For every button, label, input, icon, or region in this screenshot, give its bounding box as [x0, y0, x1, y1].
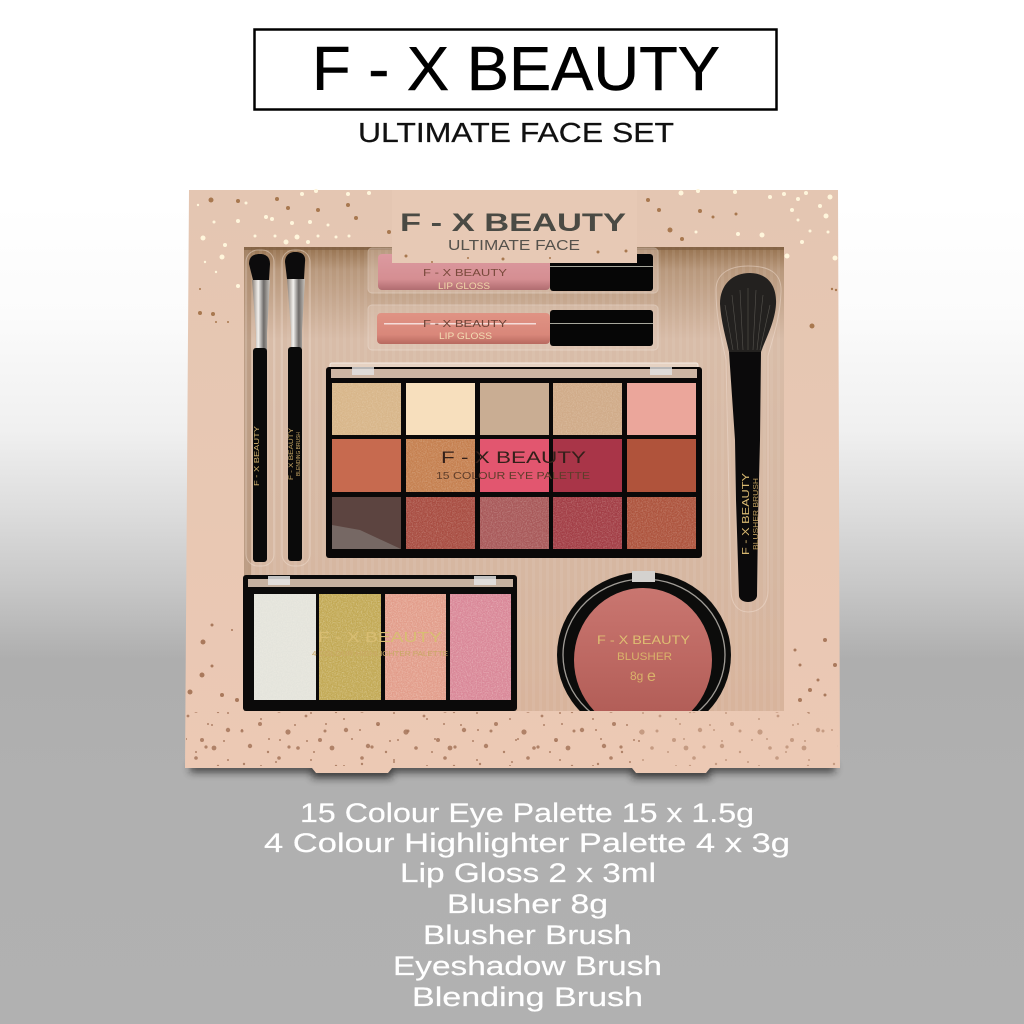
blending brush: BLENDING BRUSH: [296, 432, 302, 476]
blusher compact: 8g: [630, 669, 643, 683]
15 colour eye palette: 15 COLOUR EYE PALETTE: [436, 470, 590, 482]
blusher label: F - X BEAUTY: [597, 635, 690, 647]
top flap: F - X BEAUTY: [400, 209, 626, 237]
blusher compact: [557, 571, 731, 711]
highlighter pans: [254, 594, 511, 700]
contents list: [264, 798, 790, 1012]
subtitle: ULTIMATE FACE SET: [358, 117, 674, 148]
window tray: [244, 247, 784, 711]
lip gloss 2: LIP GLOSS: [439, 331, 492, 342]
product box shadow: [190, 764, 835, 778]
blusher brush: F - X BEAUTY: [741, 473, 752, 555]
title box: F - X BEAUTY: [312, 35, 720, 104]
contents list: Eyeshadow Brush: [393, 951, 662, 981]
palette label: F - X BEAUTY: [441, 449, 586, 467]
eyeshadow brush: F - X BEAUTY: [252, 426, 261, 486]
card frame: [185, 190, 840, 773]
top flap: ULTIMATE FACE: [448, 238, 580, 254]
blending brush: [285, 252, 305, 561]
eyeshadow pans: [332, 383, 696, 549]
lip gloss 1: F - X BEAUTY: [423, 267, 507, 279]
contents list: Blending Brush: [412, 982, 643, 1012]
4 colour highlighter palette: [243, 575, 517, 711]
lip gloss 1: LIP GLOSS: [438, 281, 490, 291]
4 colour highlighter palette: 4 COLOUR HIGHLIGHTER PALETTE: [312, 649, 448, 658]
product box: [185, 189, 840, 773]
contents list: 4 Colour Highlighter Palette 4 x 3g: [264, 828, 790, 858]
gold speckles top: [197, 189, 838, 328]
blusher compact: BLUSHER: [617, 651, 672, 663]
eyeshadow brush: [249, 254, 270, 562]
contents list: 15 Colour Eye Palette 15 x 1.5g: [300, 798, 754, 828]
blusher compact: e: [647, 668, 656, 685]
highlighter label: F - X BEAUTY: [318, 629, 442, 646]
blending brush: F - X BEAUTY: [288, 427, 295, 480]
blusher brush: BLUSHER BRUSH: [751, 478, 760, 550]
top flap: [392, 190, 637, 263]
contents list: Lip Gloss 2 x 3ml: [400, 858, 656, 888]
lip gloss 1: [368, 248, 658, 293]
title box: [254, 30, 776, 110]
gold speckles bottom: [186, 712, 838, 766]
blusher brush: [720, 273, 776, 602]
15 colour eye palette: [326, 363, 702, 558]
contents list: Blusher 8g: [447, 889, 608, 919]
blister outlines: [246, 250, 781, 612]
gold speckles left and right lower: [188, 624, 837, 702]
contents list: Blusher Brush: [423, 920, 632, 950]
lip gloss 2: [368, 305, 658, 350]
lip gloss 2: F - X BEAUTY: [423, 318, 507, 330]
